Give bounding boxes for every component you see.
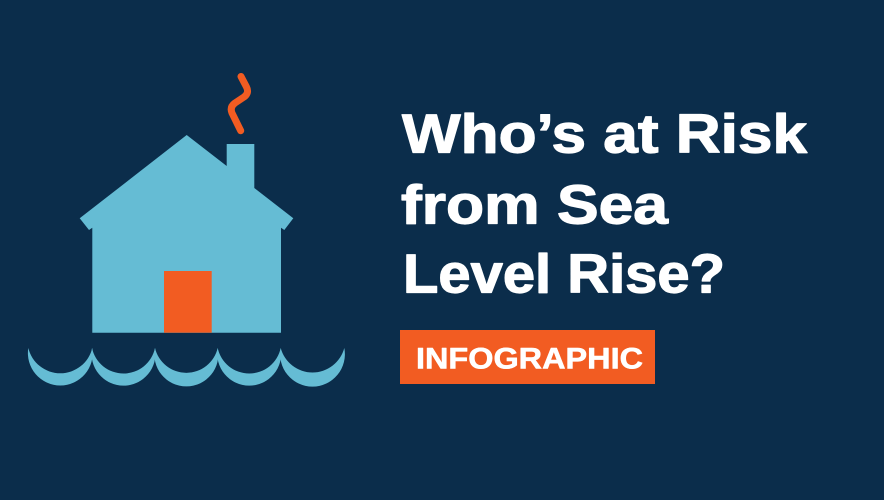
icon: door	[164, 271, 212, 333]
title line 3: Level Rise?	[403, 242, 725, 304]
icon: chimney smoke	[231, 76, 248, 131]
title	[401, 103, 807, 304]
badge text: INFOGRAPHIC	[416, 343, 643, 376]
icon: flooded house	[28, 76, 345, 387]
title line 2: from Sea	[401, 173, 668, 235]
icon: waves	[28, 348, 345, 387]
badge: infographic label	[400, 330, 655, 384]
icon: house body	[80, 135, 293, 333]
title line 1: Who’s at Risk	[402, 103, 807, 165]
